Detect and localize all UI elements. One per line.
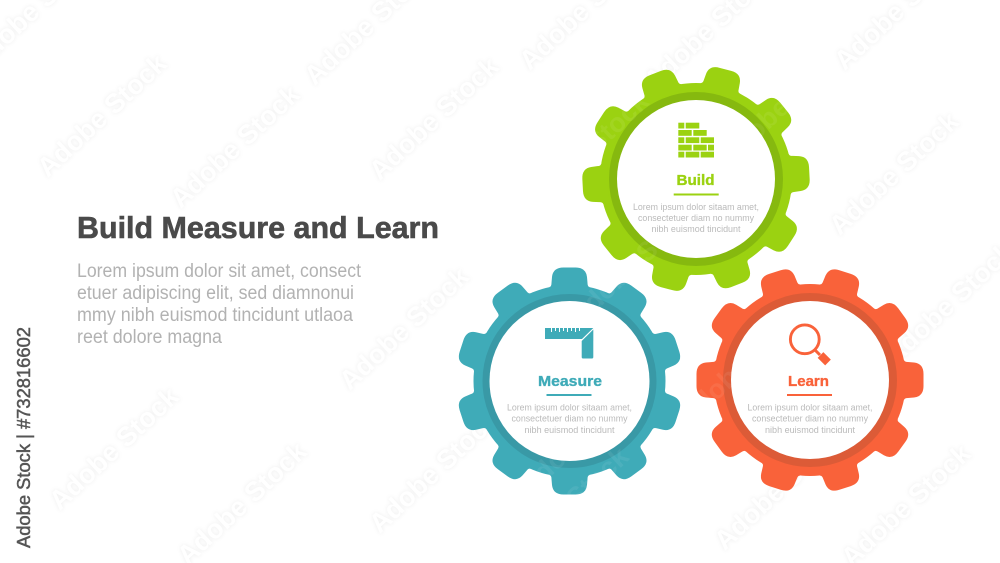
description text block: reet dolore magna: [77, 327, 222, 348]
text: Adobe Stock: [673, 296, 815, 431]
icon: ruler: [545, 328, 593, 358]
gear: Build: [582, 64, 810, 294]
title: Build Measure and Learn: [77, 210, 439, 245]
underline: [674, 194, 719, 196]
panel: Measure gear: [455, 268, 684, 494]
text: Adobe Stock: [713, 36, 855, 171]
text: Build description: [633, 202, 759, 234]
gear: Measure: [455, 268, 684, 494]
text: Measure description: [507, 402, 632, 435]
label: Build: Build: [676, 172, 714, 189]
icon: brick wall: [678, 123, 714, 158]
text: Build description: consectetuer diam no nummy: [638, 213, 754, 223]
label: Measure: Measure: [538, 373, 602, 390]
underline: [787, 394, 832, 396]
text: Adobe Stock: [513, 366, 655, 501]
label: Learn: Learn: [788, 373, 829, 390]
text: Build description: Lorem ipsum dolor sitaam amet,: [633, 202, 759, 212]
text: Measure description: consectetuer diam no nummy: [512, 414, 628, 424]
text: Adobe Stock: [31, 48, 173, 183]
text: Learn description: consectetuer diam no nummy: [752, 414, 868, 424]
text: Adobe Stock: [363, 404, 505, 539]
text: Adobe Stock: [563, 196, 705, 331]
text: Measure description: nibh euismod tincidunt: [524, 425, 615, 435]
text: Measure description: Lorem ipsum dolor sitaam amet,: [507, 402, 632, 412]
text: Learn description: nibh euismod tincidunt: [765, 425, 855, 435]
text: Learn description: [748, 402, 872, 435]
text: Learn description: Lorem ipsum dolor sitaam amet,: [748, 402, 872, 412]
text: Adobe Stock: [513, 86, 655, 221]
panel: Build gear: [582, 64, 810, 294]
text: Adobe Stock: [823, 106, 965, 241]
text: Adobe Stock: [333, 261, 475, 396]
text: Build description: nibh euismod tincidunt: [652, 224, 741, 234]
description text block: Lorem ipsum dolor sit amet, consect: [77, 261, 362, 282]
icon: magnifier: [790, 325, 828, 362]
description text block: etuer adipiscing elit, sed diamnonui: [77, 283, 354, 304]
panel: Learn gear: [696, 266, 924, 494]
text: Adobe Stock: [708, 421, 850, 556]
text: Adobe Stock: [363, 51, 505, 186]
stock credit: Adobe Stock | #732816602: [14, 327, 34, 548]
text: Adobe Stock: [43, 381, 185, 516]
underline: [546, 394, 592, 396]
gear: Learn: [696, 266, 924, 494]
description text block: mmy nibh euismod tincidunt utlaoa: [77, 305, 353, 326]
text: Adobe Stock: [164, 79, 306, 214]
description text block: [77, 261, 362, 348]
